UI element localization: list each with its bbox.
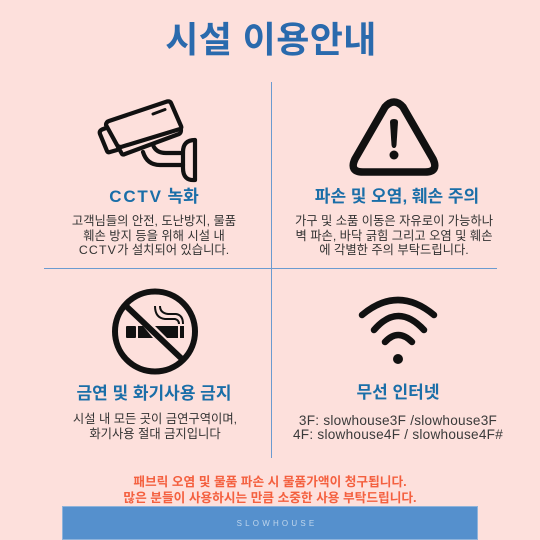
horizontal divider [44, 268, 497, 269]
heading: CCTV recording: CCTV 녹화 [109, 187, 199, 206]
vertical divider [271, 82, 272, 458]
heading: wireless internet: 무선 인터넷 [357, 383, 439, 402]
text: CCTV description: CCTV가 설치되어 있습니다. [79, 243, 229, 257]
icon: warning triangle [349, 98, 438, 176]
panel: no smoking [73, 288, 237, 441]
footer notice: 많은 분들이 사용하시는 만큼 소중한 사용 부탁드립니다. [123, 491, 417, 505]
text: wifi credentials: 3F: slowhouse3F /slowhouse3F [299, 413, 497, 428]
panel: CCTV recording [72, 99, 236, 257]
text: CCTV description [72, 214, 236, 257]
brand name: SLOWHOUSE [237, 519, 317, 528]
text: no smoking description [73, 412, 237, 441]
text: CCTV description: 훼손 방지 등을 위해 시설 내 [83, 229, 225, 243]
text: damage description: 벽 파손, 바닥 긁힘 그리고 오염 및 훼손 [295, 229, 493, 243]
icon: no smoking [112, 288, 198, 374]
heading: no smoking: 금연 및 화기사용 금지 [77, 384, 231, 403]
heading: damage and stains: 파손 및 오염, 훼손 주의 [315, 187, 479, 206]
text: wifi credentials [293, 413, 503, 442]
footer notice [123, 475, 417, 505]
footer notice: 패브릭 오염 및 물품 파손 시 물품가액이 청구됩니다. [133, 475, 407, 489]
icon: CCTV camera [98, 99, 198, 182]
text: damage description [295, 214, 493, 257]
title: 시설 이용안내 [165, 19, 377, 60]
footer bar [62, 506, 478, 540]
text: CCTV description: 고객님들의 안전, 도난방지, 물품 [72, 214, 236, 228]
text: wifi credentials: 4F: slowhouse4F / slowhouse4F# [293, 427, 503, 442]
panel: wireless internet [293, 296, 503, 442]
text: no smoking description: 화기사용 절대 금지입니다 [89, 427, 221, 441]
text: damage description: 에 각별한 주의 부탁드립니다. [319, 243, 469, 257]
text: no smoking description: 시설 내 모든 곳이 금연구역이며, [73, 412, 237, 426]
panel: damage and stains warning [295, 98, 493, 257]
text: damage description: 가구 및 소품 이동은 자유로이 가능하나 [295, 214, 493, 228]
